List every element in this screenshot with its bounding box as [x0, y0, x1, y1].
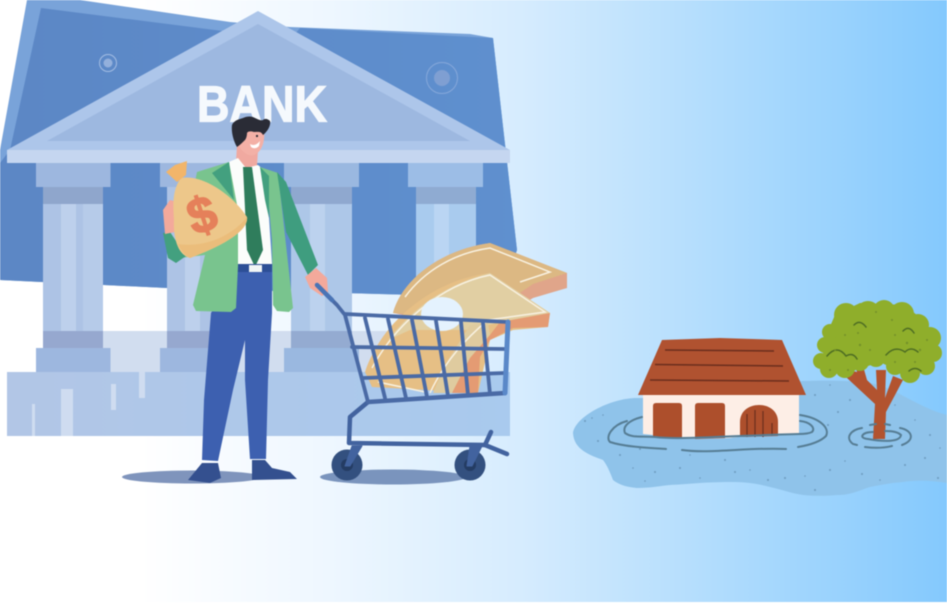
BANK sign: BANK — [197, 76, 327, 132]
cart right post — [505, 322, 508, 393]
bag sleeve — [163, 232, 186, 263]
man with money bag — [122, 116, 328, 484]
front note — [365, 273, 550, 393]
tree — [813, 300, 942, 439]
shirt — [229, 158, 272, 266]
arched door planks — [747, 410, 772, 437]
wall ornament left — [100, 54, 116, 72]
shoes — [188, 460, 297, 483]
canopy details — [827, 322, 921, 371]
dollar sign: $ — [180, 184, 224, 246]
tree trunk — [847, 366, 903, 439]
right hand — [305, 268, 328, 296]
back note — [393, 243, 567, 330]
column 4 — [408, 163, 483, 331]
banknotes — [365, 243, 567, 393]
entablature — [7, 150, 510, 163]
jacket — [180, 162, 318, 312]
house walls — [643, 395, 799, 439]
floor steps — [7, 372, 510, 436]
back wall — [0, 0, 517, 295]
shopping cart — [317, 285, 508, 484]
trousers — [202, 270, 272, 461]
cart wheels — [332, 450, 486, 480]
column 2 — [160, 163, 234, 372]
house doors — [653, 403, 778, 439]
water ripples around house — [608, 415, 827, 451]
column 3 — [284, 163, 359, 372]
cart shadow — [320, 470, 466, 484]
ground shadow under man — [122, 470, 262, 484]
tie — [243, 167, 263, 267]
pediment — [7, 11, 510, 150]
column 1 — [36, 163, 110, 372]
wall ornament right — [426, 62, 458, 94]
cart basket grid — [317, 285, 508, 402]
canopy speckles — [829, 311, 928, 371]
cart handle — [317, 285, 332, 300]
flood scene — [573, 300, 947, 496]
tree canopy — [813, 300, 942, 383]
water ripples around tree — [849, 424, 911, 448]
house — [638, 338, 806, 439]
hair — [232, 116, 270, 147]
roof — [638, 338, 806, 395]
water specks — [584, 384, 941, 491]
money bag — [166, 161, 247, 258]
upper plinth — [43, 331, 481, 372]
left hand — [163, 200, 182, 234]
neck and head — [232, 116, 270, 174]
bank building — [0, 0, 517, 436]
belt — [237, 264, 272, 272]
cart chassis — [345, 402, 507, 466]
flood water — [573, 381, 947, 496]
